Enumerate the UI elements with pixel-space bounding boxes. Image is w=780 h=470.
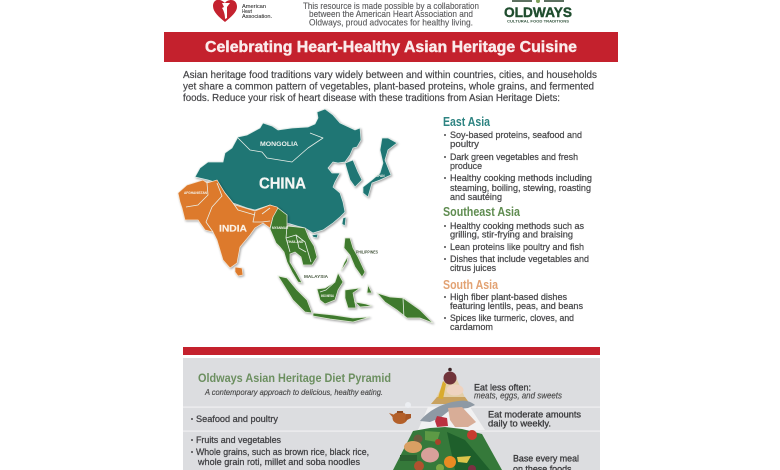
label: eat moderate amounts: Eat moderate amounts [488, 410, 581, 420]
panel: East Asia: poultry [450, 138, 479, 149]
map: South Asia region [178, 180, 280, 276]
panel: East Asia: Soy-based proteins, seafood and [450, 129, 582, 140]
map: Southeast Asia region [270, 208, 433, 323]
panel: East Asia: Healthy cooking methods including [450, 172, 592, 183]
map label: India: INDIA [219, 224, 247, 234]
map label: Mongolia: MONGOLIA [260, 141, 298, 148]
map: Mongolia border [238, 133, 323, 162]
panel: East Asia: Dark green vegetables and fresh [450, 151, 578, 162]
tier: seafood and poultry [418, 401, 485, 430]
panel: Southeast Asia: Southeast Asia [443, 205, 521, 219]
logo: American Heart Association: Association. [242, 14, 272, 20]
map label: Philippines: PHILIPPINES [356, 250, 378, 254]
label: eat less often: Eat less often: [474, 382, 531, 394]
panel: South Asia [443, 278, 583, 332]
panel: South Asia: featuring lentils, peas, and beans [450, 300, 583, 311]
collaboration note: between the American Heart Association and [309, 9, 473, 19]
panel: diet pyramid [183, 358, 600, 470]
logo: Oldways: OLDWAYS [504, 4, 572, 20]
label: eat less often: meats, eggs, and sweets [474, 390, 562, 400]
left list: Fruits and vegetables [196, 435, 281, 445]
panel: Southeast Asia [443, 205, 589, 273]
map: South Asia borders [186, 183, 270, 232]
panel: South Asia: South Asia [443, 278, 499, 292]
panel: East Asia: steaming, boiling, stewing, roasting [450, 182, 591, 193]
panel: East Asia: East Asia [443, 115, 491, 129]
collaboration note [303, 1, 479, 28]
logo: Oldways [504, 0, 572, 24]
panel: South Asia: Spices like turmeric, cloves, and [450, 312, 574, 323]
map label: Thailand: THAILAND [287, 240, 304, 244]
label: eat moderate amounts [488, 410, 581, 430]
map of Asia [178, 109, 433, 323]
map: Southeast Asia borders [286, 226, 404, 318]
panel: Southeast Asia: Healthy cooking methods such as [450, 220, 584, 231]
left list: Whole grains, such as brown rice, black rice, [196, 447, 369, 457]
red divider bar [183, 347, 600, 355]
icon: teapot [389, 402, 411, 424]
intro text: foods. Reduce your risk of heart disease with these traditions from Asian Heritage Diets: [183, 93, 560, 104]
panel: East Asia: produce [450, 160, 482, 171]
label: eat moderate amounts: daily to weekly. [488, 418, 551, 430]
collaboration note: This resource is made possible by a collaboration [303, 1, 479, 11]
logo: American Heart Association [213, 0, 272, 22]
panel: Southeast Asia: citrus juices [450, 262, 496, 273]
intro text: Asian heritage food traditions vary widely between and within countries, cities, and households [183, 70, 597, 81]
intro text [183, 70, 597, 104]
panel: Southeast Asia: Dishes that include vegetables and [450, 253, 589, 264]
map label: Myanmar: MYANMAR [272, 226, 289, 230]
tier: plant foods and grains [393, 427, 502, 470]
logo: Oldways: CULTURAL FOOD TRADITIONS [507, 20, 569, 24]
left list [191, 414, 369, 467]
pyramid heading: Oldways Asian Heritage Diet Pyramid [198, 371, 391, 385]
illustration: food pyramid [393, 368, 502, 470]
panel: South Asia: High fiber plant-based dishes [450, 291, 567, 302]
left list: Seafood and poultry [196, 414, 278, 424]
tier: meats, eggs and sweets [431, 368, 470, 404]
map label: Japan: JAPAN [374, 174, 385, 178]
left list: whole grain roti, millet and soba noodles [197, 457, 360, 467]
map label: Indonesia: INDONESIA [321, 294, 335, 298]
logo: American Heart Association: American [242, 4, 266, 10]
panel: East Asia [443, 115, 592, 202]
panel: South Asia: cardamom [450, 321, 493, 332]
panel: East Asia: and sautéing [450, 191, 502, 202]
map: East Asia region [195, 109, 397, 238]
pyramid subtitle: A contemporary approach to delicious, healthy eating. [204, 388, 383, 397]
panel: Southeast Asia: grilling, stir-frying and braising [450, 228, 573, 240]
title banner: Celebrating Heart-Healthy Asian Heritage Cuisine [205, 39, 577, 56]
map label: China: CHINA [259, 176, 306, 192]
logo: American Heart Association: Heart [242, 9, 252, 15]
collaboration note: Oldways, proud advocates for healthy living. [309, 18, 473, 28]
panel: Southeast Asia: Lean proteins like poultry and fish [450, 241, 584, 252]
label: base every meal: Base every meal [513, 454, 579, 464]
label: base every meal [513, 454, 579, 470]
title banner [164, 32, 618, 62]
label: eat less often [474, 382, 562, 400]
intro text: yet share a common pattern of vegetables, plant-based proteins, whole grains, and fermented [183, 82, 594, 92]
map label: Afghanistan: AFGHANISTAN [184, 191, 208, 195]
map label: Malaysia: MALAYSIA [304, 274, 329, 279]
